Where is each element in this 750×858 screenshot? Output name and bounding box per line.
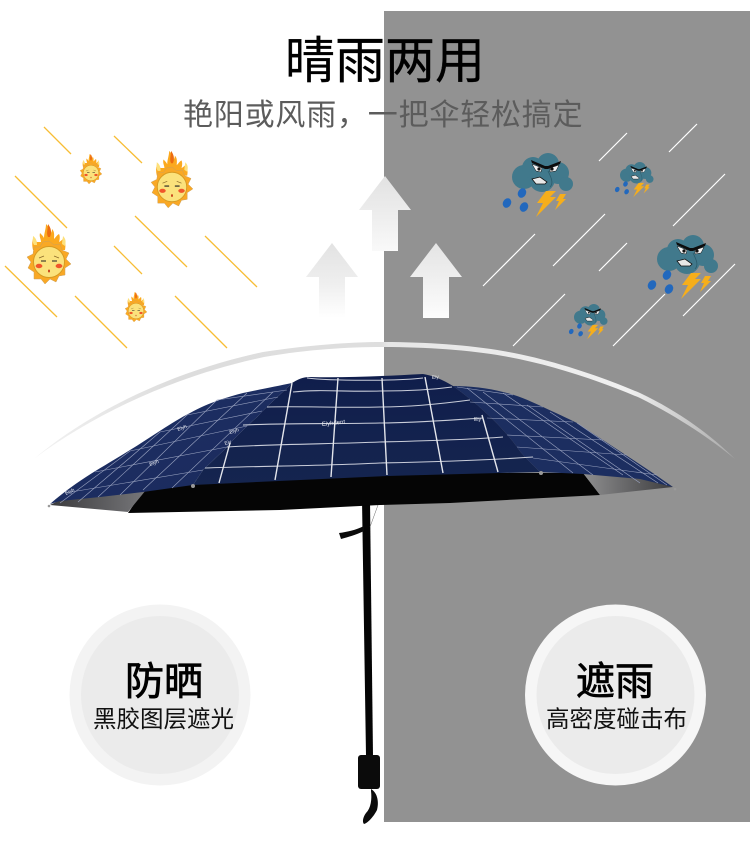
icon: small sun top (80, 154, 102, 184)
icon: angry cloud top left (501, 153, 573, 217)
umbrella (48, 374, 676, 824)
canopy centre panel (193, 374, 540, 485)
black underside (128, 473, 600, 513)
canopy brand marks: Eiyh (64, 487, 76, 497)
badge caption: sun protection: 黑胶图层遮光 (93, 706, 234, 732)
canopy brand marks: Eiy (224, 439, 233, 447)
title: 晴雨两用 (285, 33, 485, 89)
subtitle: 艳阳或风雨，一把伞轻松搞定 (183, 99, 583, 132)
umbrella handle (358, 755, 380, 789)
icon: large sun left (27, 224, 71, 284)
icon: small sun bottom (125, 292, 147, 322)
underside right grey flap (583, 473, 673, 495)
left panel grid lines (60, 390, 287, 503)
canopy brand marks: Eiyh (177, 424, 188, 433)
rib tips (48, 471, 676, 507)
arrow: top centre (359, 176, 411, 251)
canopy left panel (50, 383, 292, 504)
rainy side streaks (483, 124, 735, 346)
arrow: right (410, 243, 462, 318)
icon: large sun top (151, 151, 193, 208)
closure strap (339, 526, 364, 539)
canopy brand marks: Eiyh (229, 427, 240, 436)
protective arc over umbrella (35, 342, 735, 459)
badge heading: rain protection: 遮雨 (576, 661, 654, 704)
icon: small angry cloud top (614, 162, 654, 197)
badge heading: sun protection: 防晒 (125, 661, 203, 704)
canopy brand marks: Eiy (474, 417, 481, 423)
sunny rain streaks (5, 127, 257, 348)
badge: sun protection (70, 604, 250, 786)
right panel grid lines (457, 387, 667, 485)
panel: grey rainy side (384, 11, 750, 822)
arrow: left (306, 243, 358, 318)
badge caption: rain protection: 高密度碰击布 (546, 706, 687, 732)
wrist strap (363, 789, 378, 824)
canopy right panel (453, 386, 673, 487)
canopy brand marks (64, 374, 481, 497)
canopy brand marks: Eiy (432, 374, 440, 381)
umbrella pole (362, 500, 373, 756)
centre grid lines (205, 377, 533, 483)
canopy brand marks: Eiyh (149, 459, 160, 468)
icon: angry cloud right (646, 235, 718, 299)
canopy brand marks: Eiyhdent (322, 420, 346, 428)
icon: small angry cloud bottom (568, 304, 608, 339)
underside left grey flap (50, 490, 146, 512)
badge: rain protection (525, 604, 706, 786)
